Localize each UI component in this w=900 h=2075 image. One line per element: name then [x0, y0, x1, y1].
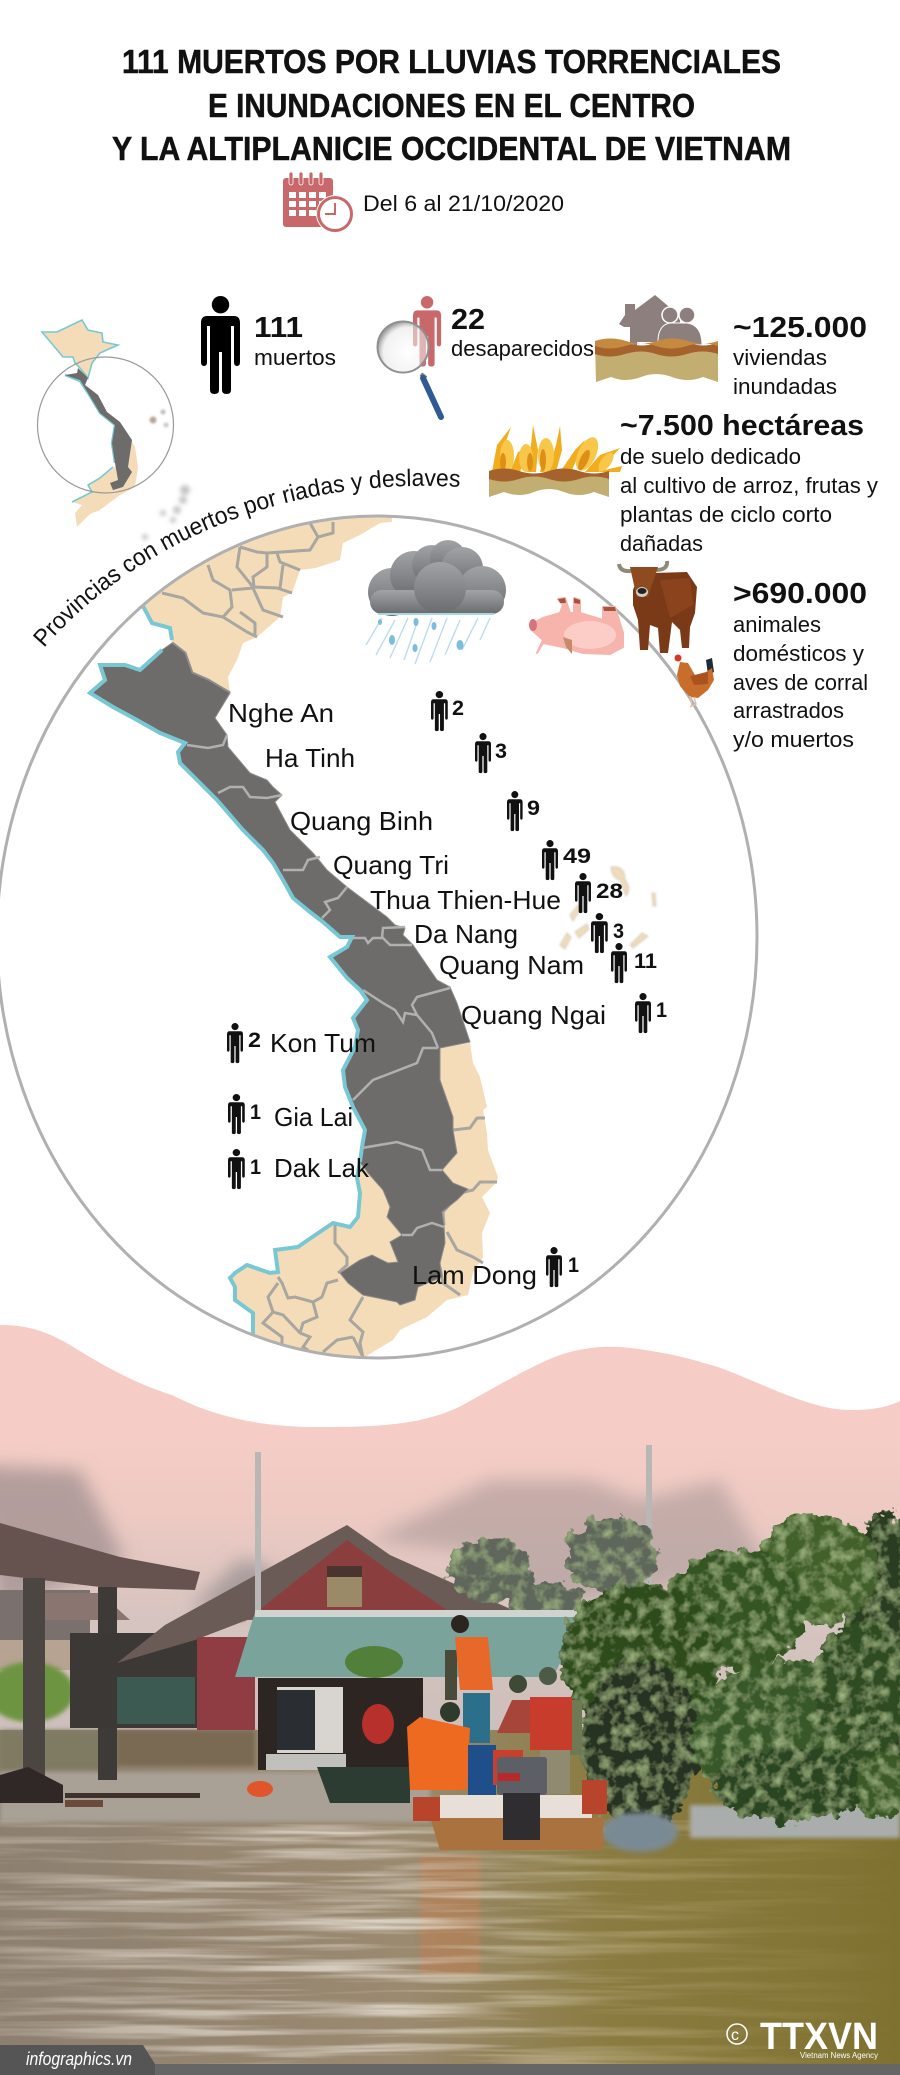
pavilion [0, 1523, 200, 1807]
province: Nghe An [228, 691, 464, 731]
islands [560, 867, 656, 949]
mountains [0, 1465, 770, 1610]
province: Nghe An: 2 [452, 697, 464, 720]
province: Dak Lak [228, 1149, 370, 1189]
water ripples [0, 1820, 900, 2065]
stat: damaged crops: de suelo dedicado [620, 444, 801, 469]
stat: animals [733, 578, 868, 752]
TTXVN logo: TTXVN [760, 2016, 878, 2058]
stat: dead: muertos [254, 345, 336, 370]
province: Quang Tri: Quang Tri [333, 850, 449, 880]
province: Quang Ngai [461, 993, 667, 1033]
province: Kon Tum [227, 1023, 376, 1063]
province: Da Nang: Da Nang [414, 919, 518, 949]
stat: flooded homes: inundadas [733, 374, 837, 399]
province: Dak Lak: Dak Lak [274, 1153, 370, 1183]
province: Quang Tri: 49 [563, 845, 591, 868]
stat: flooded homes: viviendas [733, 345, 827, 370]
stat: missing: 22 [451, 304, 485, 336]
title: E INUNDACIONES EN EL CENTRO [208, 87, 695, 124]
dark affected provinces [90, 643, 470, 1305]
province borders inside dark area [187, 735, 450, 1235]
stat: animals: arrastrados [733, 698, 844, 723]
icon: bull [619, 561, 697, 653]
big map circle [0, 490, 757, 1380]
stat: dead: 111 [254, 312, 303, 344]
province: Dak Lak: 1 [250, 1156, 261, 1179]
curved heading: Provincias con muertos por riadas y deslaves [32, 468, 460, 647]
foliage [560, 1510, 900, 1852]
province: Ha Tinh: Ha Tinh [265, 743, 355, 773]
icon: magnifier over person [378, 296, 441, 417]
icon: hen [674, 654, 714, 707]
province: Da Nang [414, 913, 624, 953]
stat: damaged crops: plantas de ciclo corto [620, 502, 832, 527]
stat: dead [201, 296, 336, 394]
title [112, 43, 791, 167]
icon: flooded house [595, 295, 718, 382]
stat: animals: domésticos y [733, 641, 864, 666]
flagpoles [255, 1445, 652, 1617]
province: Quang Ngai: 1 [656, 999, 667, 1022]
shed [235, 1610, 586, 1803]
southern pale provinces [230, 1043, 498, 1380]
stat: missing: desaparecidos [451, 336, 594, 361]
province: Gia Lai: 1 [250, 1101, 261, 1124]
icon: wheat field [489, 425, 622, 497]
stat: animals: y/o muertos [733, 727, 854, 752]
province: Lam Dong: Lam Dong [412, 1260, 537, 1290]
icon: person [201, 296, 240, 394]
province: Quang Binh: 9 [527, 797, 540, 820]
title: Y LA ALTIPLANICIE OCCIDENTAL DE VIETNAM [112, 130, 791, 167]
province: Quang Ngai: Quang Ngai [461, 1000, 606, 1030]
teal west coast line [90, 650, 367, 1162]
province: Nghe An: Nghe An [228, 698, 334, 728]
footer tab [0, 2045, 155, 2075]
stat: damaged crops: ~7.500 hectáreas [620, 410, 864, 442]
photo: flood rescue scene [0, 1440, 900, 2075]
province: Lam Dong [412, 1247, 579, 1290]
stat: missing [378, 296, 594, 417]
date: Del 6 al 21/10/2020 [363, 191, 564, 216]
circle outline [0, 516, 757, 1358]
icon: calendar and clock [283, 172, 354, 233]
province: Gia Lai: Gia Lai [274, 1102, 353, 1132]
province: Thua Thien-Hue: 28 [596, 880, 623, 903]
red house [70, 1525, 517, 1730]
province: Kon Tum: Kon Tum [270, 1028, 376, 1058]
locator map of Vietnam [38, 320, 190, 540]
stat: animals: aves de corral [733, 670, 868, 695]
province: Thua Thien-Hue: Thua Thien-Hue [370, 885, 561, 915]
province: Quang Nam: Quang Nam [439, 950, 584, 980]
stat: animals: animales [733, 612, 821, 637]
province: Quang Nam [439, 943, 657, 983]
province: Kon Tum: 2 [248, 1029, 261, 1052]
province: Thua Thien-Hue [370, 873, 623, 915]
background trees [448, 1517, 660, 1618]
northern pale provinces [142, 518, 392, 692]
TTXVN logo: c [731, 2027, 739, 2044]
title: 111 MUERTOS POR LLUVIAS TORRENCIALES [122, 43, 781, 80]
footer bar [0, 2064, 900, 2075]
stat: damaged crops [489, 410, 878, 556]
rescue boat with crew [407, 1615, 607, 1850]
province: Gia Lai [228, 1094, 353, 1134]
stat: damaged crops: al cultivo de arroz, frutas y [620, 473, 878, 498]
province: Ha Tinh [265, 733, 507, 773]
province: Da Nang: 3 [613, 920, 624, 943]
stat: animals: >690.000 [733, 578, 867, 610]
TTXVN logo: Vietnam News Agency [800, 2051, 878, 2060]
water tones [0, 1730, 480, 1975]
icon: pig [529, 598, 623, 654]
pink wave [0, 1325, 900, 1470]
map of central Vietnam [90, 490, 498, 1380]
province: Quang Nam: 11 [634, 950, 657, 973]
icon: rain cloud [366, 540, 506, 664]
website credit: infographics.vn [26, 2049, 132, 2069]
stat: damaged crops: dañadas [620, 531, 703, 556]
province: Ha Tinh: 3 [495, 740, 507, 763]
province: Quang Binh [290, 791, 540, 836]
province: Lam Dong: 1 [568, 1254, 579, 1277]
province: Quang Binh: Quang Binh [290, 806, 433, 836]
water [0, 1730, 900, 2075]
stat: flooded homes [595, 295, 867, 399]
stat: flooded homes: ~125.000 [733, 312, 867, 344]
province: Quang Tri [333, 840, 591, 880]
